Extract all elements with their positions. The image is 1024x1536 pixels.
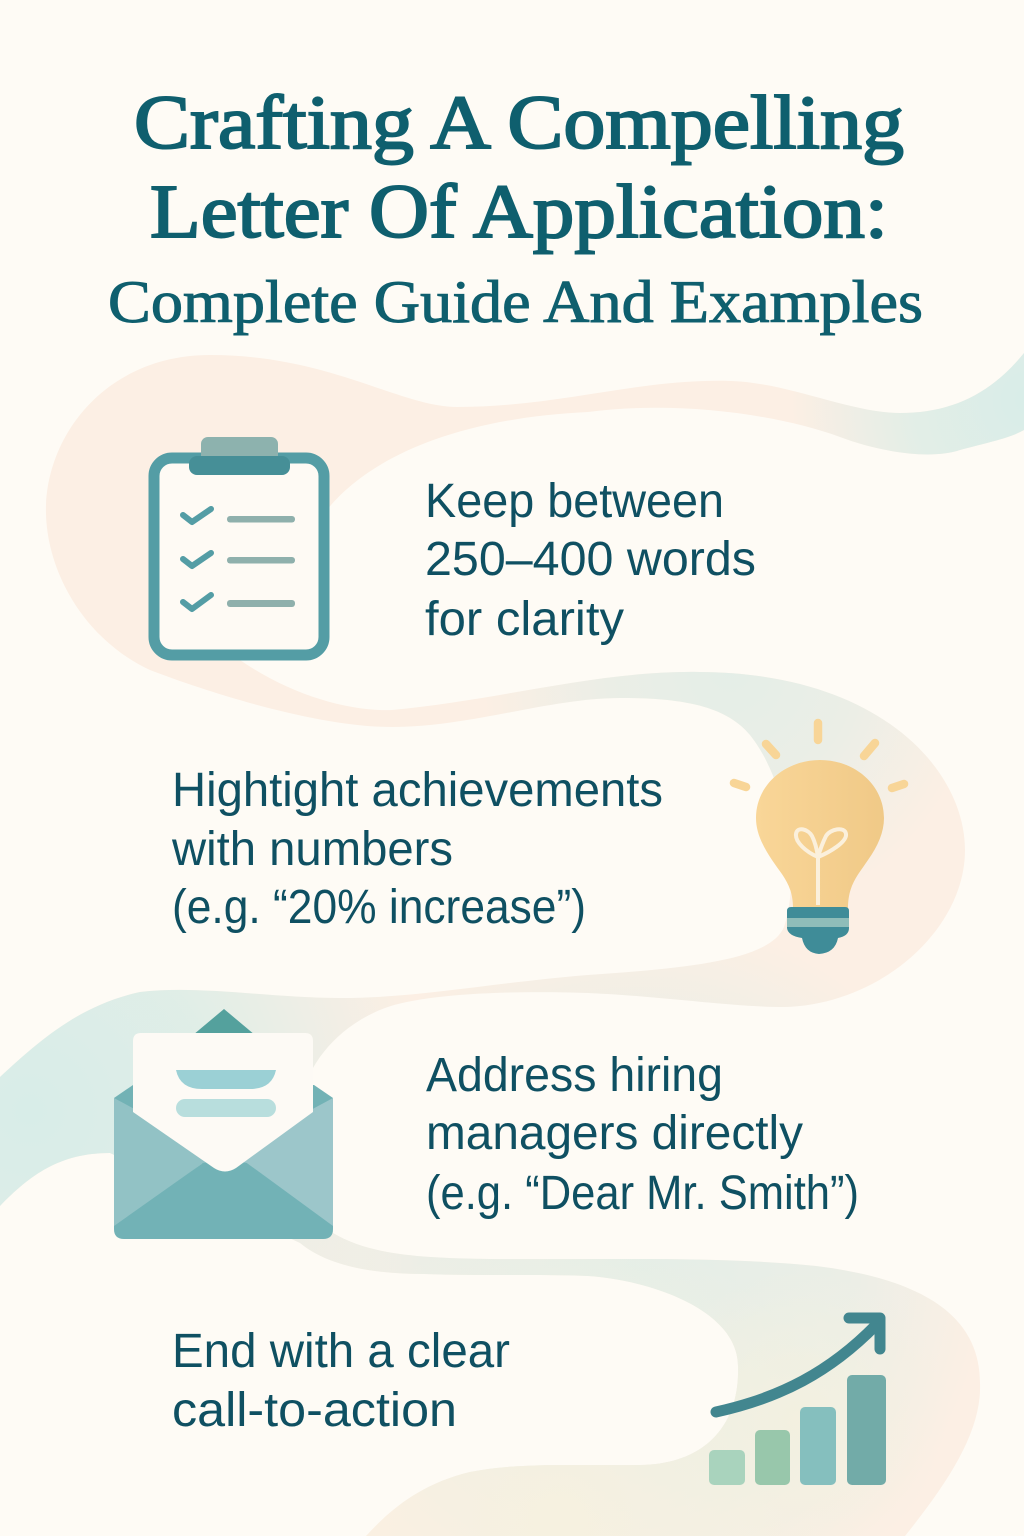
text: keep between bbox=[425, 475, 756, 646]
icon: growth chart bbox=[709, 1318, 886, 1485]
title: Crafting A Compelling bbox=[134, 81, 904, 165]
text: address hiring managers: (e.g. “Dear Mr. Smith”) bbox=[426, 1167, 859, 1220]
icon: clipboard bbox=[154, 437, 324, 655]
icon: open envelope bbox=[114, 1009, 333, 1239]
text: end with call to action bbox=[172, 1325, 510, 1437]
text: end with call to action: call-to-action bbox=[172, 1384, 457, 1437]
text: highlight achievements bbox=[171, 764, 663, 934]
icon: light bulb bbox=[734, 723, 904, 954]
text: address hiring managers bbox=[426, 1049, 859, 1220]
title bbox=[108, 81, 923, 335]
text: highlight achievements: Hightight achievements bbox=[172, 764, 663, 817]
text: keep between: Keep between bbox=[425, 475, 724, 528]
flowing ribbon background bbox=[0, 353, 1024, 1536]
text: highlight achievements: with numbers bbox=[171, 823, 453, 876]
title: Letter Of Application: bbox=[150, 170, 888, 254]
text: highlight achievements: (e.g. “20% increase”) bbox=[172, 881, 586, 934]
text: address hiring managers: Address hiring bbox=[426, 1049, 723, 1102]
text: keep between: 250–400 words bbox=[425, 533, 756, 586]
text: address hiring managers: managers directly bbox=[426, 1107, 803, 1160]
text: end with call to action: End with a clear bbox=[172, 1325, 510, 1378]
text: keep between: for clarity bbox=[425, 593, 624, 646]
title: Complete Guide And Examples bbox=[108, 269, 923, 335]
